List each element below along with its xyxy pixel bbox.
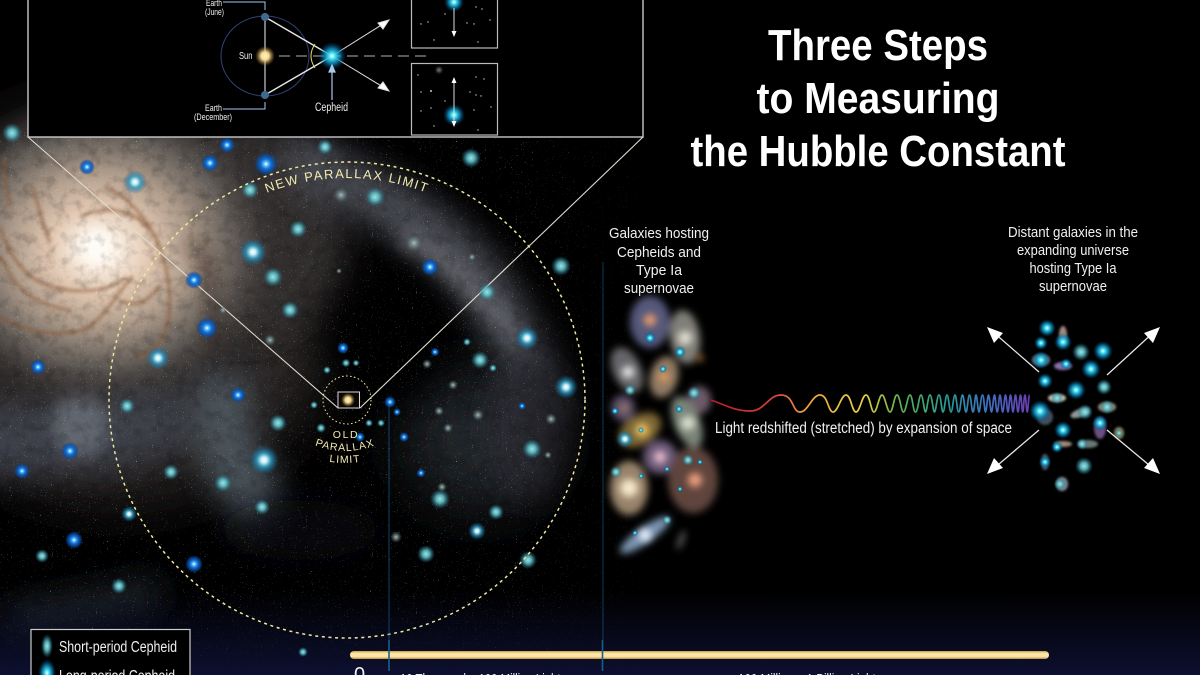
connector lines from old parallax box to inset [28,137,643,408]
label: galaxies hosting Cepheids: supernovae [624,280,694,297]
old parallax limit circle and sun box [323,376,371,424]
spiral galaxy background [0,90,640,675]
legend icon: long-period Cepheid [38,659,56,675]
inset labels [194,0,348,123]
june star field box [412,0,498,48]
earth pointers [223,2,265,109]
wave caption: Light redshifted (stretched) by expansion of space [715,420,1012,437]
inset labels: (December) [194,112,232,123]
label: old parallax limit: LIMIT [330,454,359,463]
parallax triangle [265,17,332,95]
redshift light wave [711,395,1030,412]
label: distant galaxies: hosting Type Ia [1030,260,1117,277]
diverging arrows [332,20,389,91]
title [690,21,1066,176]
new parallax limit circle [109,162,585,638]
label: distant galaxies: expanding universe [1017,242,1129,259]
title: to Measuring [756,74,1000,123]
label: old parallax limit: PARALLAX [316,438,374,452]
label: distant galaxies [1008,224,1138,295]
expansion arrows [987,327,1160,474]
earth december [261,91,269,99]
cepheid pointer [329,65,335,100]
distance markers [389,262,603,671]
label: galaxies hosting Cepheids: Cepheids and [617,244,701,261]
title: the Hubble Constant [690,127,1066,176]
Cepheid stars field [2,123,578,657]
inset labels: Earth [205,103,222,114]
sun [255,46,275,66]
distant galaxy cluster [1029,319,1124,491]
label: distant galaxies: Distant galaxies in the [1008,224,1138,241]
label: old parallax limit [316,429,374,463]
earth orbit [221,16,309,96]
legend icon: short-period Cepheid [41,634,53,658]
label: new parallax limit: NEW PARALLAX LIMIT [264,169,429,192]
legend text: Short-period Cepheid [59,639,177,656]
bottom navy glow [0,590,1200,675]
nearby galaxy cluster [604,296,718,559]
distance scale bar [350,651,1049,659]
scale labels [354,664,908,675]
label: old parallax limit: OLD [333,429,359,441]
label: galaxies hosting Cepheids [609,225,709,297]
inset labels: Cepheid [315,102,348,114]
title: Three Steps [768,21,988,70]
inset labels: (June) [205,7,224,18]
label: distant galaxies: supernovae [1039,278,1107,295]
dashed baseline [279,55,426,57]
inset labels: Sun [239,51,252,62]
label: galaxies hosting Cepheids: Galaxies hosting [609,225,709,242]
cepheid star [318,42,346,70]
earth june [261,13,269,21]
december star field box [412,64,498,135]
inset panel: parallax diagram [28,0,643,137]
label: galaxies hosting Cepheids: Type Ia [636,262,683,279]
legend text [59,639,177,675]
legend [31,630,190,675]
